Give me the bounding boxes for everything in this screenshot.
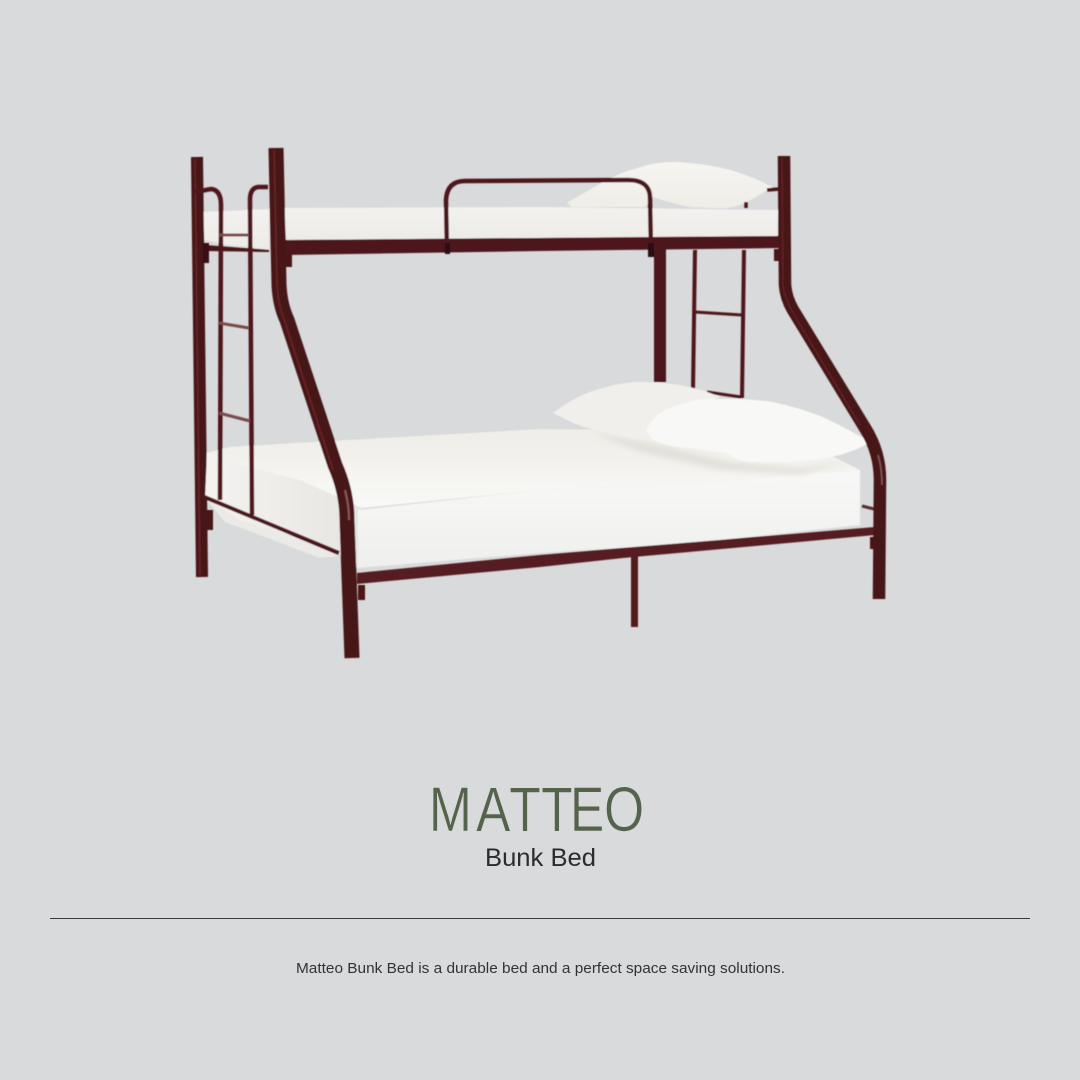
upper side rail (285, 236, 783, 267)
title: MATTEO: MATTEO (429, 775, 644, 845)
front left post (274, 148, 352, 658)
lower mattress front (358, 470, 860, 568)
front right post (782, 156, 882, 599)
shadow under pillows (590, 432, 855, 474)
slat strip under side rail (207, 500, 338, 558)
lower side rail (202, 496, 339, 553)
lower mattress left side (205, 440, 362, 568)
right ladder (693, 250, 744, 398)
guard rail (445, 180, 654, 257)
upper rail far end (205, 245, 269, 252)
subtitle: Bunk Bed: Bunk Bed (485, 844, 596, 872)
lower left pillow (553, 382, 720, 440)
bunk bed illustration (195, 148, 882, 658)
centre support post (654, 248, 666, 382)
upper pillow (567, 162, 772, 208)
lower right pillow (646, 399, 870, 462)
description text: Matteo Bunk Bed is a durable bed and a perfect space saving solutions. (296, 960, 785, 977)
back left post (195, 157, 213, 577)
lower mattress top (207, 429, 860, 508)
upper mattress (283, 207, 778, 240)
lower front rail (357, 506, 880, 600)
lower mattress (205, 429, 860, 568)
divider line (50, 918, 1030, 919)
left ladder (195, 187, 268, 515)
centre leg (631, 556, 638, 627)
upper mattress far end (203, 209, 269, 249)
short rail behind pillow (746, 189, 779, 208)
